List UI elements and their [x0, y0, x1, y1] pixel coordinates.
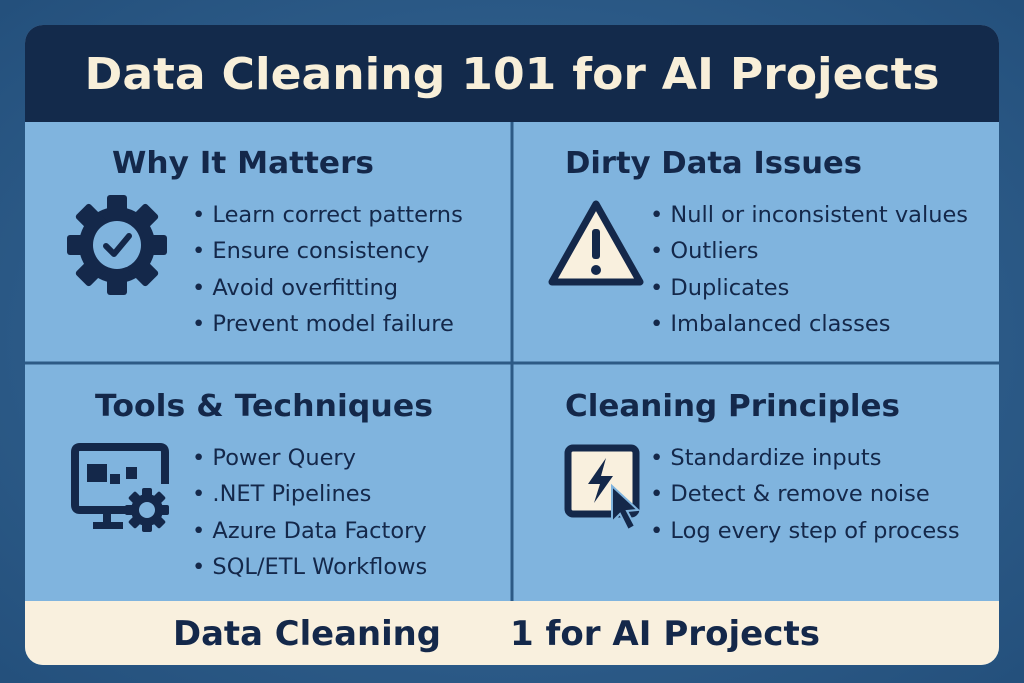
footer text: 1 for AI Projects: [510, 614, 820, 654]
heading: tools & techniques: Tools & Techniques: [95, 389, 433, 424]
footer text: [173, 614, 820, 654]
icon: monitor with gear: [75, 447, 169, 532]
bullets: dirty data issues: [650, 202, 968, 337]
bullets: dirty data issues: • Imbalanced classes: [650, 311, 890, 337]
bullets: dirty data issues: • Outliers: [650, 238, 759, 264]
header bar: [25, 25, 999, 122]
footer bar: [25, 601, 999, 665]
panel: dirty data issues: [552, 146, 968, 337]
panel: why it matters: [67, 146, 463, 337]
bullets: tools: [192, 445, 427, 580]
bullets: tools: • SQL/ETL Workflows: [192, 554, 427, 580]
bullets: why it matters: [192, 202, 463, 337]
icon: gear with check: [67, 195, 167, 295]
panel: cleaning principles: [565, 389, 960, 544]
panel: tools and techniques: [75, 389, 433, 580]
bullets: why it matters: • Avoid overfitting: [192, 275, 398, 301]
heading: dirty data issues: Dirty Data Issues: [565, 146, 862, 181]
bullets: principles: • Detect & remove noise: [650, 481, 930, 507]
bullets: principles: • Log every step of process: [650, 518, 960, 544]
heading: cleaning principles: Cleaning Principles: [565, 389, 900, 424]
icon: warning triangle: [552, 204, 640, 282]
bullets: dirty data issues: • Duplicates: [650, 275, 789, 301]
bullets: why it matters: • Prevent model failure: [192, 311, 454, 337]
bullets: dirty data issues: • Null or inconsistent values: [650, 202, 968, 228]
bullets: tools: • Power Query: [192, 445, 356, 471]
bullets: why it matters: • Ensure consistency: [192, 238, 429, 264]
bullets: principles: [650, 445, 960, 544]
footer text: Data Cleaning: [173, 614, 441, 654]
bullets: principles: • Standardize inputs: [650, 445, 881, 471]
icon: lightning box with cursor: [568, 448, 638, 530]
heading: why it matters: Why It Matters: [112, 146, 374, 181]
bullets: tools: • .NET Pipelines: [192, 481, 371, 507]
bullets: why it matters: • Learn correct patterns: [192, 202, 463, 228]
bullets: tools: • Azure Data Factory: [192, 518, 427, 544]
title: Data Cleaning 101 for AI Projects: [84, 49, 940, 100]
